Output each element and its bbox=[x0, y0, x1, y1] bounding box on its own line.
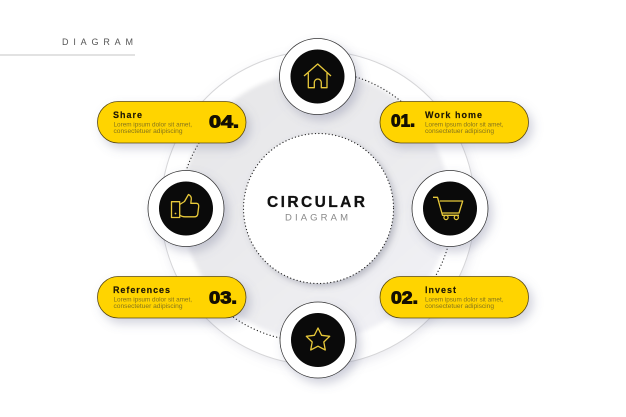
panel: 02 Invest: Lorem ipsum dolor sit amet, bbox=[425, 296, 504, 304]
panel: 03 References: consectetuer adipiscing bbox=[114, 303, 183, 310]
icon: cart node bbox=[412, 170, 488, 246]
panel: 03 References: References bbox=[113, 285, 170, 295]
panel: 04 Share bbox=[98, 102, 246, 143]
panel: central circle bbox=[244, 134, 394, 284]
central subtitle: DIAGRAM bbox=[285, 212, 348, 224]
header label bbox=[0, 37, 135, 56]
central title: CIRCULAR bbox=[267, 194, 365, 211]
panel: 03 References bbox=[98, 276, 246, 318]
panel: 03 References: 03. bbox=[209, 288, 237, 308]
panel: 01 Work home: Work home bbox=[425, 110, 482, 120]
header label: DIAGRAM bbox=[62, 37, 133, 47]
panel: 01 Work home: Lorem ipsum dolor sit amet, bbox=[425, 122, 504, 128]
icon: star node bbox=[280, 302, 356, 378]
icon: thumbs up node bbox=[148, 170, 224, 246]
dotted connector arcs bbox=[186, 77, 448, 338]
panel: 02 Invest: 02. bbox=[391, 288, 418, 308]
panel: 03 References: Lorem ipsum dolor sit amet, bbox=[114, 296, 192, 304]
panel: 02 Invest bbox=[380, 276, 528, 318]
panel: 02 Invest: consectetuer adipiscing bbox=[425, 303, 495, 310]
panel: outer ring and gray disc bbox=[161, 51, 475, 365]
panel: 04 Share: consectetuer adipiscing bbox=[114, 128, 183, 135]
panel: 04 Share: Lorem ipsum dolor sit amet, bbox=[114, 122, 192, 128]
panel: 01 Work home: consectetuer adipiscing bbox=[425, 128, 495, 135]
panel: 04 Share: Share bbox=[113, 110, 142, 120]
panel: 04 Share: 04. bbox=[209, 112, 239, 132]
icon: house node bbox=[280, 38, 356, 114]
panel: 02 Invest: Invest bbox=[425, 285, 456, 295]
panel: 01 Work home: 01. bbox=[391, 110, 415, 130]
panel: 01 Work home bbox=[380, 102, 528, 143]
